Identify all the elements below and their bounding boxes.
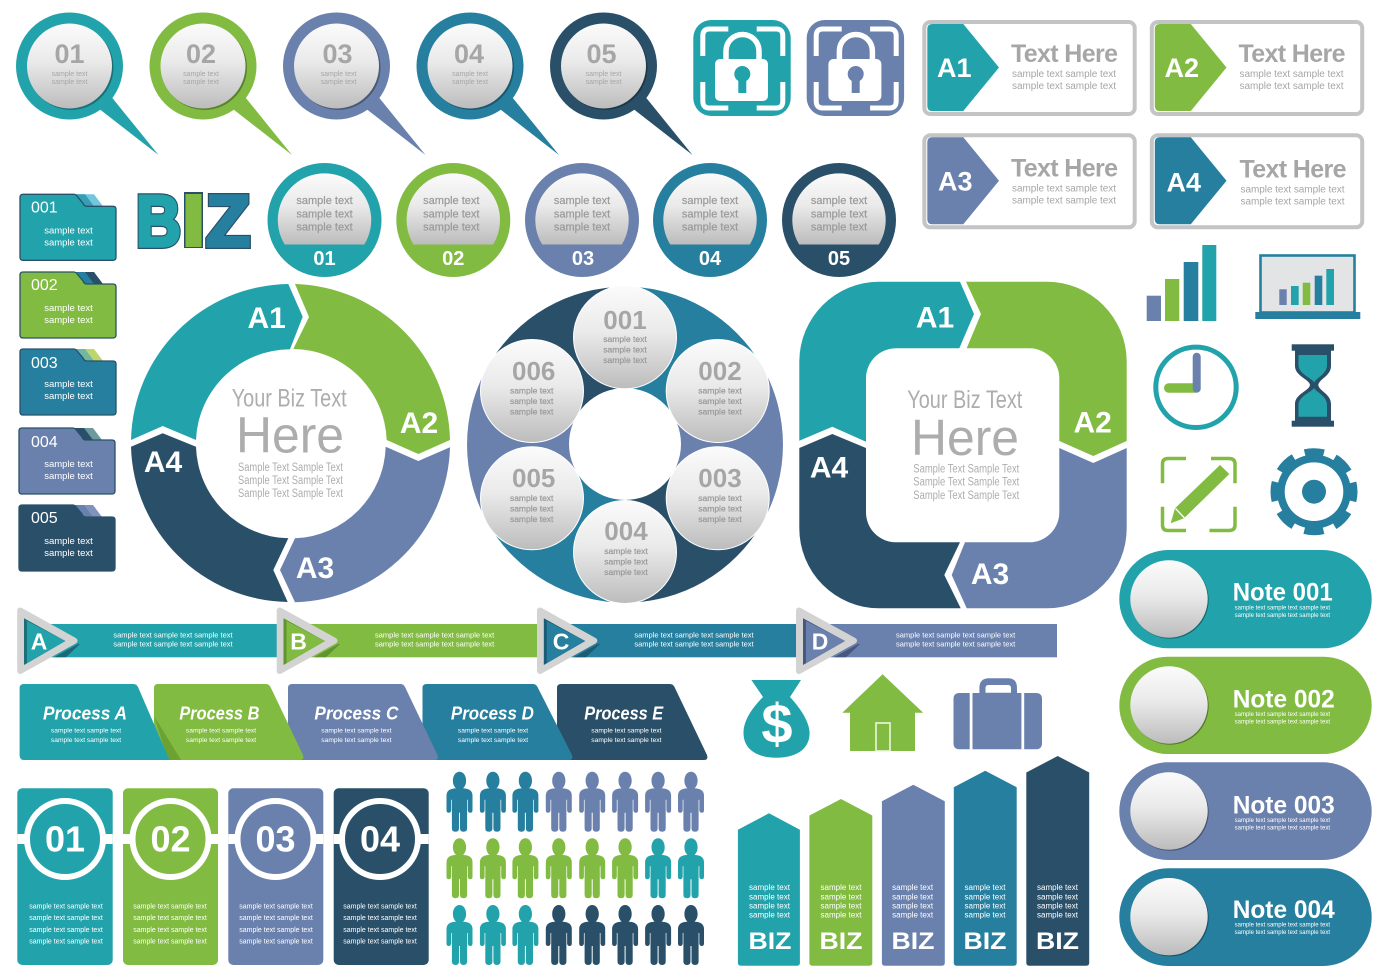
icon: pencil xyxy=(1162,458,1235,530)
item 004: 004 xyxy=(604,516,648,546)
card A1: Text Here xyxy=(1011,40,1118,68)
item 002: sample text xyxy=(698,396,742,406)
card A4: A4 xyxy=(1167,167,1201,197)
item 004: sample text xyxy=(604,546,648,556)
rounded square diagram A1-A4: A4 xyxy=(810,452,848,485)
note 004: sample text sample text sample text xyxy=(1235,922,1330,928)
segment A2 xyxy=(293,284,450,454)
folder 002: 002 xyxy=(31,277,58,294)
item 005 xyxy=(480,447,584,550)
arrow column 3: sample text xyxy=(892,911,934,920)
step panel 04: sample text sample text xyxy=(343,938,417,946)
center text: Sample Text Sample Text xyxy=(238,462,344,474)
badge 05: sample text xyxy=(811,222,867,234)
arrow column 5 xyxy=(1026,756,1089,966)
center text xyxy=(232,385,347,500)
pin callout 03 xyxy=(283,12,426,155)
folder 005: 005 xyxy=(31,510,58,527)
pin callout 04 xyxy=(416,12,559,155)
arrow banner A xyxy=(20,610,277,671)
segment A4 xyxy=(131,433,288,602)
card A2: Text Here xyxy=(1239,40,1346,68)
item 002 xyxy=(666,340,769,442)
pin callout 02: 02 xyxy=(186,39,216,69)
rounded square diagram A1-A4: A1 xyxy=(916,301,954,334)
card A2: A2 xyxy=(1165,53,1199,83)
arrow column 2 xyxy=(809,799,872,966)
item 001: sample text xyxy=(603,334,647,344)
folder 002: sample text xyxy=(44,303,93,314)
item 004 xyxy=(574,500,676,604)
process D: Process D xyxy=(451,703,534,723)
note 004 xyxy=(1119,868,1372,966)
note 002 xyxy=(1119,657,1372,754)
step panel 01: sample text sample text xyxy=(29,903,103,910)
arrow banner A: sample text sample text sample text xyxy=(113,631,234,640)
badge 01: 01 xyxy=(313,248,336,270)
note 002: sample text sample text sample text xyxy=(1235,720,1330,726)
process A: sample text sample text xyxy=(51,737,121,744)
step panel 02: 02 xyxy=(150,819,191,860)
item 002: 002 xyxy=(698,356,742,386)
donut diagram A1-A4: A4 xyxy=(144,446,182,479)
card A4: Text Here xyxy=(1240,155,1347,183)
segment A1 xyxy=(131,284,303,440)
folder 004: sample text xyxy=(44,459,93,470)
process B: Process B xyxy=(179,703,259,723)
arrow column 5: BIZ xyxy=(1036,928,1079,955)
item 001: sample text xyxy=(603,344,647,354)
note 003 xyxy=(1119,762,1372,860)
card A4: sample text sample text xyxy=(1241,196,1345,207)
arrow column 4: sample text xyxy=(965,911,1006,920)
donut diagram A1-A4: A3 xyxy=(296,552,334,585)
process E: sample text sample text xyxy=(591,737,662,744)
card A3 xyxy=(924,135,1135,227)
badge 05 xyxy=(782,163,896,277)
badge 03: sample text xyxy=(554,195,610,207)
process C xyxy=(288,684,438,760)
process C: Process C xyxy=(314,703,399,723)
arrow banner A: sample text sample text sample text xyxy=(113,640,234,649)
arrow column 4 xyxy=(954,771,1017,966)
item 005: sample text xyxy=(510,514,554,524)
arrow banner C xyxy=(540,610,797,671)
badge 04: sample text xyxy=(682,222,738,234)
badge 02: sample text xyxy=(423,195,479,207)
item 006: sample text xyxy=(510,396,554,406)
icon: hourglass xyxy=(1292,344,1334,427)
folder 003: sample text xyxy=(44,379,93,390)
item 003: sample text xyxy=(698,514,742,524)
icon: bar chart xyxy=(1147,245,1216,321)
step panel 03: sample text sample text xyxy=(239,938,313,946)
folder 001: sample text xyxy=(44,237,93,248)
item 006: sample text xyxy=(510,406,554,416)
badge 01: sample text xyxy=(296,195,353,207)
arrow column 1: sample text xyxy=(749,892,791,901)
folder 004 xyxy=(19,428,115,494)
folder 005 xyxy=(19,505,115,571)
note 001: sample text sample text sample text xyxy=(1235,606,1330,612)
step panel 03 xyxy=(228,788,323,965)
icon: gear xyxy=(1275,453,1353,531)
arrow column 3: sample text xyxy=(892,883,934,892)
badge 03: sample text xyxy=(554,222,610,234)
arrow banner D: sample text sample text sample text xyxy=(896,640,1016,649)
step panel 01: sample text sample text xyxy=(29,938,103,946)
process B: sample text sample text xyxy=(186,727,256,734)
arrow banner D: D xyxy=(812,628,828,654)
step panel 04 xyxy=(334,788,429,965)
center text: Your Biz Text xyxy=(232,385,347,413)
card A2: sample text sample text xyxy=(1240,69,1344,80)
step panel 01: sample text sample text xyxy=(29,927,103,934)
logo: BIZ: B xyxy=(136,182,181,262)
arrow column 5: sample text xyxy=(1037,892,1079,901)
ring diagram 001-006 xyxy=(467,286,783,604)
card A4: sample text sample text xyxy=(1241,184,1345,195)
card A3: sample text sample text xyxy=(1012,195,1116,206)
arrow column 1: sample text xyxy=(749,883,791,892)
process C: sample text sample text xyxy=(321,737,392,744)
item 001: sample text xyxy=(603,355,647,365)
arrow banner A: A xyxy=(31,628,47,654)
step panel 01: 01 xyxy=(45,819,85,860)
step panel 02: sample text sample text xyxy=(133,927,207,934)
arrow column 3: sample text xyxy=(892,902,934,910)
item 005: sample text xyxy=(510,504,554,514)
pin callout 04: sample text xyxy=(452,79,488,86)
item 004: sample text xyxy=(604,556,648,566)
note 003: sample text sample text sample text xyxy=(1235,818,1330,824)
process B xyxy=(154,684,303,760)
item 002: sample text xyxy=(698,406,742,416)
item 002: sample text xyxy=(698,386,742,396)
process E xyxy=(557,684,707,760)
pin callout 05: 05 xyxy=(586,39,617,69)
process A: Process A xyxy=(43,703,127,723)
arrow column 4: sample text xyxy=(965,892,1006,901)
rounded square diagram A1-A4 xyxy=(799,282,1127,608)
step panel 02: sample text sample text xyxy=(133,938,207,946)
pin callout 01: 01 xyxy=(54,39,85,69)
folder 004: sample text xyxy=(44,471,93,482)
pin callout 03: sample text xyxy=(321,79,356,86)
step panel 02: sample text sample text xyxy=(133,903,207,910)
arrow column 4: BIZ xyxy=(964,928,1006,955)
folder 004: 004 xyxy=(31,434,58,451)
badge 01: sample text xyxy=(296,208,353,220)
badge 03: 03 xyxy=(572,248,594,270)
card A4 xyxy=(1152,135,1362,227)
item 003 xyxy=(666,447,769,550)
badge 04: 04 xyxy=(699,248,722,270)
logo: BIZ: Z xyxy=(206,182,250,262)
badge 02: 02 xyxy=(442,248,464,270)
arrow banner C: sample text sample text sample text xyxy=(634,640,755,649)
pin callout 03: 03 xyxy=(322,39,353,69)
note 003: Note 003 xyxy=(1233,791,1335,819)
arrow banner D: sample text sample text sample text xyxy=(896,631,1016,640)
badge 04 xyxy=(653,163,767,277)
arrow column 3: BIZ xyxy=(892,928,934,955)
card A2 xyxy=(1152,22,1362,114)
card A3: A3 xyxy=(938,166,973,196)
pin callout 04: 04 xyxy=(454,39,484,69)
arrow column 4: sample text xyxy=(965,902,1006,910)
arrow column 5: sample text xyxy=(1037,883,1079,892)
arrow column 1: sample text xyxy=(749,911,791,920)
note 002: Note 002 xyxy=(1233,685,1335,713)
item 006: sample text xyxy=(510,386,554,396)
segment A1 xyxy=(799,282,974,442)
process B: sample text sample text xyxy=(186,737,256,744)
step panel 01: sample text sample text xyxy=(29,915,103,922)
step panel 03: sample text sample text xyxy=(239,915,313,922)
donut diagram A1-A4 xyxy=(131,284,450,602)
process chevrons A-E xyxy=(20,684,707,760)
note 004: sample text sample text sample text xyxy=(1235,930,1330,936)
center text: Here xyxy=(236,407,344,464)
arrow banner D xyxy=(799,610,1057,671)
badge 05: sample text xyxy=(811,208,867,220)
icon: house xyxy=(842,674,923,751)
process A: sample text sample text xyxy=(51,727,121,734)
note 004: Note 004 xyxy=(1233,896,1335,924)
badge 02: sample text xyxy=(423,222,479,234)
arrow column 2: sample text xyxy=(821,892,862,901)
segment A3 xyxy=(280,447,450,602)
card A1: sample text sample text xyxy=(1012,69,1116,80)
logo: BIZ: B xyxy=(136,182,181,262)
note 001 xyxy=(1119,550,1372,648)
donut diagram A1-A4: A1 xyxy=(248,302,286,335)
item 006 xyxy=(480,340,584,442)
arrow banner B xyxy=(280,610,537,671)
icon: money bag: $ xyxy=(761,692,793,755)
process D: sample text sample text xyxy=(458,737,528,744)
folder 002 xyxy=(20,272,116,338)
pin callout 05: sample text xyxy=(586,79,621,86)
arrow column 1 xyxy=(738,813,800,966)
note 001: Note 001 xyxy=(1233,579,1333,607)
step panel 03: sample text sample text xyxy=(239,903,313,910)
folder 005: sample text xyxy=(44,536,93,547)
people pictogram grid xyxy=(446,772,704,965)
card A1: A1 xyxy=(937,53,972,83)
item 005: sample text xyxy=(510,493,554,503)
arrow column 2: BIZ xyxy=(820,928,862,955)
arrow column 5: sample text xyxy=(1037,902,1079,910)
center text: Sample Text Sample Text xyxy=(913,464,1020,476)
process D: sample text sample text xyxy=(458,727,528,734)
arrow column 5: sample text xyxy=(1037,911,1079,920)
badge 04: sample text xyxy=(682,195,738,207)
pin callout 02 xyxy=(150,12,292,155)
segment A4 xyxy=(799,434,961,608)
item 003: 003 xyxy=(698,463,742,493)
rounded square diagram A1-A4: A2 xyxy=(1074,406,1112,439)
center text: Sample Text Sample Text xyxy=(238,488,344,500)
pin callout 05 xyxy=(550,12,692,155)
item 001 xyxy=(574,286,676,389)
center text: Here xyxy=(911,409,1019,466)
pin callout 03: sample text xyxy=(321,71,356,78)
folder 003: 003 xyxy=(31,355,58,372)
note 001: sample text sample text sample text xyxy=(1235,613,1330,619)
card A3: sample text sample text xyxy=(1012,183,1116,194)
icon: money bag xyxy=(744,680,810,758)
badge 05: sample text xyxy=(811,195,867,207)
item 001: 001 xyxy=(603,305,647,335)
arrow column 3 xyxy=(882,785,945,966)
badge 02: sample text xyxy=(423,208,479,220)
folder 002: sample text xyxy=(44,315,93,326)
arrow banner C: sample text sample text sample text xyxy=(634,631,755,640)
step panel 04: sample text sample text xyxy=(343,903,417,910)
process A xyxy=(20,684,169,760)
card A1 xyxy=(924,22,1135,114)
process D xyxy=(422,684,572,760)
arrow column 1: sample text xyxy=(749,902,791,910)
arrow column 3: sample text xyxy=(892,892,934,901)
arrow banner B: B xyxy=(290,628,307,654)
step panel 01 xyxy=(17,788,113,965)
badge 02 xyxy=(396,163,510,277)
arrow column 2: sample text xyxy=(821,911,862,920)
item 003: sample text xyxy=(698,493,742,503)
center text: Your Biz Text xyxy=(907,386,1022,414)
badge 01: sample text xyxy=(296,222,353,234)
step panel 03: sample text sample text xyxy=(239,927,313,934)
donut diagram A1-A4: A2 xyxy=(400,407,438,440)
center text: Sample Text Sample Text xyxy=(913,490,1020,502)
card A1: sample text sample text xyxy=(1012,81,1116,92)
step panel 04: sample text sample text xyxy=(343,915,417,922)
card A2: sample text sample text xyxy=(1240,81,1344,92)
item 006: 006 xyxy=(512,356,555,386)
step panel 02 xyxy=(123,788,218,965)
process E: sample text sample text xyxy=(591,727,662,734)
pin callout 02: sample text xyxy=(183,79,219,86)
icon: slate lock xyxy=(807,20,904,116)
segment A3 xyxy=(952,448,1127,608)
badge 04: sample text xyxy=(682,208,738,220)
icon: briefcase xyxy=(954,678,1042,749)
pin callout 01: sample text xyxy=(52,79,87,86)
folder 003: sample text xyxy=(44,391,93,402)
arrow column 2: sample text xyxy=(821,902,862,910)
folder 005: sample text xyxy=(44,548,93,559)
folder 001 xyxy=(20,194,116,260)
badge 01 xyxy=(268,163,382,277)
logo: BIZ: Z xyxy=(206,182,250,262)
step panel 02: sample text sample text xyxy=(133,915,207,922)
arrow column 1: BIZ xyxy=(748,928,792,955)
icon: clock xyxy=(1156,347,1236,427)
step panel 03: 03 xyxy=(255,819,296,860)
note 003: sample text sample text sample text xyxy=(1235,826,1330,832)
center text xyxy=(907,386,1022,502)
icon: teal lock xyxy=(693,20,791,116)
center text: Sample Text Sample Text xyxy=(913,477,1020,489)
folder 003 xyxy=(20,349,116,415)
item 005: 005 xyxy=(512,463,555,493)
arrow banner B: sample text sample text sample text xyxy=(375,640,495,649)
item 004: sample text xyxy=(604,567,648,577)
segment A2 xyxy=(966,282,1127,456)
item 003: sample text xyxy=(698,504,742,514)
rounded square diagram A1-A4: A3 xyxy=(971,558,1009,591)
center text: Sample Text Sample Text xyxy=(238,475,344,487)
pin callout 05: sample text xyxy=(586,71,621,78)
card A3: Text Here xyxy=(1011,154,1118,182)
arrow banner B: sample text sample text sample text xyxy=(375,631,495,640)
badge 03: sample text xyxy=(554,208,610,220)
logo: BIZ xyxy=(136,182,250,262)
pin callout 04: sample text xyxy=(452,71,488,78)
process C: sample text sample text xyxy=(321,727,392,734)
step panel 04: sample text sample text xyxy=(343,927,417,934)
note 002: sample text sample text sample text xyxy=(1235,712,1330,718)
arrow column 4: sample text xyxy=(965,883,1006,892)
pin callout 01 xyxy=(16,12,158,155)
folder 001: sample text xyxy=(44,225,93,236)
folder 001: 001 xyxy=(31,199,58,216)
badge 03 xyxy=(525,163,639,277)
pin callout 02: sample text xyxy=(183,71,219,78)
arrow column 2: sample text xyxy=(821,883,862,892)
icon: laptop chart xyxy=(1255,256,1360,319)
process E: Process E xyxy=(584,703,664,723)
pin callout 01: sample text xyxy=(52,71,87,78)
arrow banner C: C xyxy=(553,628,569,654)
badge 05: 05 xyxy=(828,248,850,270)
step panel 04: 04 xyxy=(360,819,400,860)
